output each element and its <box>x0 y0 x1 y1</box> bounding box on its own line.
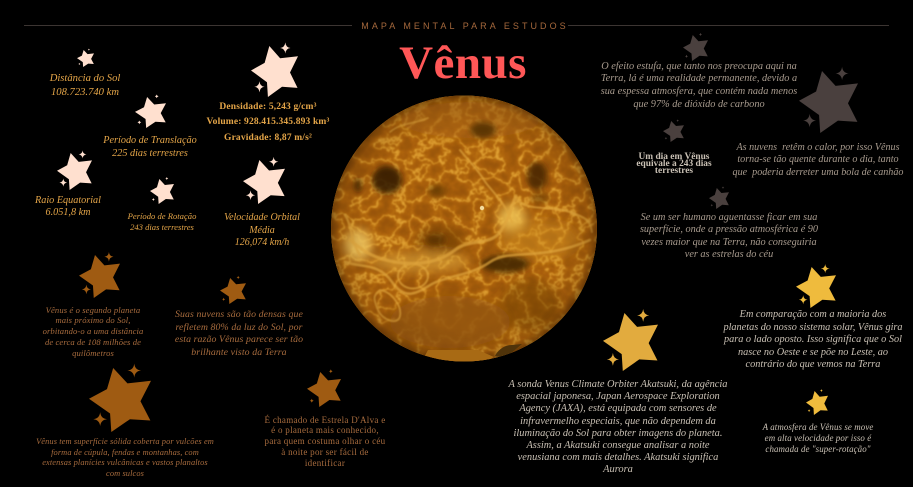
text: sonda akatsuki: A sonda Venus Climate Orbiter Akatsuki, da agência <box>509 379 727 390</box>
star: efeito estufa <box>683 33 708 61</box>
star: segundo planeta <box>79 252 120 298</box>
text: comparação: para o lado oposto. Isso significa que o Sol <box>724 334 902 345</box>
text: densidade volume gravidade: Gravidade: 8,87 m/s² <box>224 133 312 143</box>
text: nuvens retêm calor: que poderia derreter uma bola de canhão <box>733 167 903 178</box>
text: um dia em vênus: Um dia em Vênus <box>639 152 709 162</box>
text: nuvens densas: brilhante visto da Terra <box>191 347 287 358</box>
text: velocidade orbital: Velocidade Orbital <box>224 212 300 223</box>
text: sonda akatsuki: espacial japonesa, Japan Aerospace Exploration <box>516 391 720 402</box>
text: período de rotação <box>128 211 196 232</box>
star: período de translação <box>135 95 166 128</box>
text: período de translação <box>103 135 197 159</box>
text: estrela d'alva: para quem costuma olhar o céu <box>265 436 385 446</box>
text: distância do sol <box>50 73 120 98</box>
text: superfície: extensas planícies vulcânicas e vastos planaltos <box>42 458 208 467</box>
star: nuvens retêm calor <box>799 67 858 133</box>
text: distância do sol: Distância do Sol <box>50 73 120 84</box>
text: efeito estufa: O efeito estufa, que tanto nos preocupa aqui na <box>601 60 797 72</box>
text: ser humano: Se um ser humano aguentasse ficar em sua <box>641 212 817 222</box>
text: segundo planeta: orbitando-o a uma distância <box>43 326 143 336</box>
text: segundo planeta: mais próximo do Sol, <box>55 315 131 325</box>
text: sonda akatsuki: Assim, a Akatsuki consegue analisar a noite <box>526 440 710 451</box>
text: superfície: forma de cúpula, fendas e montanhas, com <box>51 448 199 457</box>
planet Venus <box>331 95 597 365</box>
text: ser humano <box>640 212 818 260</box>
text: efeito estufa: Terra, lá é uma realidade permanente, devido a <box>601 73 797 84</box>
text: atmosfera <box>762 422 874 454</box>
text: efeito estufa <box>600 60 797 110</box>
text: raio equatorial: Raio Equatorial <box>35 194 101 206</box>
text: sonda akatsuki <box>508 379 727 475</box>
star: distância do sol <box>77 49 94 67</box>
star: superfície <box>89 364 151 432</box>
text: nuvens retêm calor: torna-se tão quente durante o dia, tanto <box>737 154 899 165</box>
text: sonda akatsuki: Agency (JAXA), está equipada com sensores de <box>519 403 717 414</box>
text: atmosfera: A atmosfera de Vênus se move <box>763 422 873 432</box>
text: segundo planeta: quilômetros <box>72 348 114 358</box>
text: comparação: planetas do nosso sistema solar, Vênus gira <box>723 322 903 333</box>
star: raio equatorial <box>57 150 92 190</box>
star: densidade <box>251 42 298 97</box>
text: nuvens densas: esta razão Vênus parece ser tão <box>175 334 303 345</box>
text: segundo planeta: Vênus é o segundo planeta <box>46 304 140 314</box>
text: um dia em vênus: terrestres <box>655 166 693 176</box>
text: período de rotação: Período de Rotação <box>128 211 196 221</box>
text: ser humano: ver as estrelas do céu <box>685 249 773 260</box>
text: velocidade orbital <box>224 212 300 248</box>
star: velocidade orbital <box>243 157 285 204</box>
text: ser humano: vezes maior que na Terra, não conseguiria <box>641 237 817 248</box>
text: um dia em vênus: equivale a 243 dias <box>636 159 712 169</box>
text: comparação: Em comparação com a maioria dos <box>740 309 886 320</box>
text: densidade volume gravidade <box>206 102 330 143</box>
text: período de rotação: 243 dias terrestres <box>130 222 194 232</box>
star: um dia em vênus <box>663 119 684 142</box>
text: efeito estufa: sua espessa atmosfera, que contém nada menos <box>601 86 797 97</box>
star: nuvens densas <box>220 276 246 304</box>
title: Vênus <box>399 37 527 89</box>
text: estrela d'alva: identificar <box>305 458 345 468</box>
text: superfície <box>36 437 214 478</box>
text: nuvens retêm calor <box>732 142 904 178</box>
text: estrela d'alva: É chamado de Estrela D'Alva e <box>264 414 386 424</box>
text: densidade volume gravidade: Densidade: 5,243 g/cm³ <box>219 102 317 112</box>
text: superfície: Vênus tem superfície sólida coberta por vulcões em <box>36 437 214 446</box>
text: sonda akatsuki: Aurora <box>603 464 633 475</box>
text: período de translação: 225 dias terrestres <box>112 148 188 159</box>
star: sonda akatsuki <box>603 309 658 371</box>
text: nuvens densas: refletem 80% da luz do Sol, por <box>175 322 303 333</box>
top divider left <box>24 25 352 26</box>
text: estrela d'alva: à noite por ser fácil de <box>281 447 369 457</box>
text: velocidade orbital: Média <box>249 225 275 236</box>
text: atmosfera: chamada de "super-rotação" <box>765 444 871 454</box>
text: estrela d'alva <box>264 414 386 468</box>
star: ser humano <box>709 186 729 209</box>
text: sonda akatsuki: venusiana com mais detalhes. Akatsuki significa <box>518 452 718 463</box>
text: segundo planeta: de cerca de 108 milhões de <box>45 337 141 347</box>
text: efeito estufa: que 97% de dióxido de carbono <box>633 99 765 110</box>
star: estrela d'alva <box>307 369 341 407</box>
text: raio equatorial <box>35 194 101 218</box>
text: distância do sol: 108.723.740 km <box>51 87 119 98</box>
text: velocidade orbital: 126,074 km/h <box>235 237 289 248</box>
text: estrela d'alva: é o planeta mais conhecido, <box>271 425 379 435</box>
star: atmosfera <box>806 389 828 415</box>
text: superfície: com sulcos <box>106 469 144 478</box>
text: raio equatorial: 6.051,8 km <box>46 207 90 218</box>
text: nuvens densas: Suas nuvens são tão densas que <box>175 309 303 320</box>
header label: MAPA MENTAL PARA ESTUDOS <box>361 21 569 31</box>
text: nuvens densas <box>175 309 303 358</box>
text: ser humano: superfície, onde a pressão atmosférica é 90 <box>640 224 818 235</box>
top divider right <box>568 25 889 26</box>
text: comparação: nasce no Oeste e se põe no Leste, ao <box>738 347 888 358</box>
star: período de rotação <box>150 177 174 204</box>
text: período de translação: Período de Translação <box>103 135 197 146</box>
text: segundo planeta <box>42 304 143 358</box>
star: comparação <box>796 264 836 308</box>
text: atmosfera: em alta velocidade por isso é <box>765 433 871 443</box>
text: comparação: contrário do que vemos na Terra <box>746 359 880 370</box>
text: sonda akatsuki: infravermelho especiais, que não dependem da <box>520 416 716 427</box>
text: nuvens retêm calor: As nuvens retêm o calor, por isso Vênus <box>736 142 900 152</box>
text: sonda akatsuki: iluminação do Sol para obter imagens do planeta. <box>514 428 722 439</box>
text: comparação <box>722 309 903 370</box>
text: um dia em vênus <box>636 152 712 176</box>
text: densidade volume gravidade: Volume: 928.415.345.893 km³ <box>207 117 329 127</box>
